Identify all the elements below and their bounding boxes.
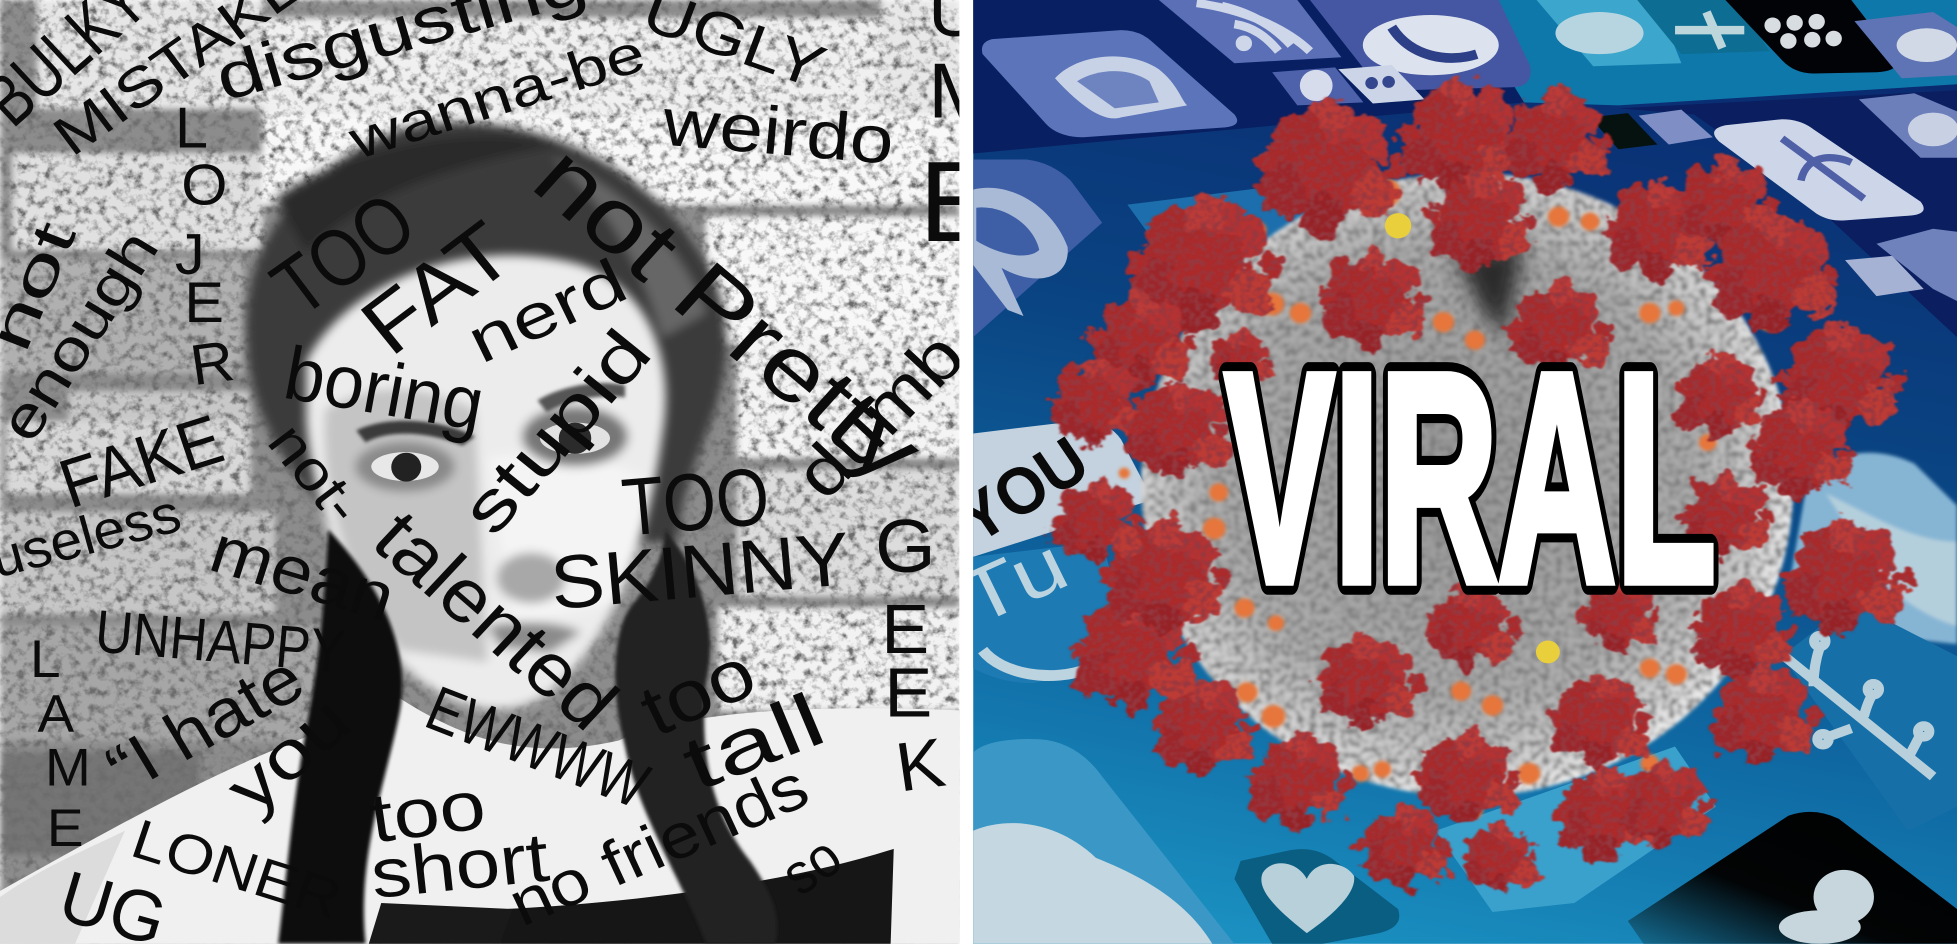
word: geek e: E xyxy=(884,654,932,731)
icon: usb symbol xyxy=(1769,636,1933,777)
word: no friends: no friends xyxy=(498,750,819,940)
top navy band xyxy=(973,0,1524,154)
dark right band xyxy=(1618,90,1957,337)
icon: black dots xyxy=(1725,0,1897,73)
word: lame m: M xyxy=(45,739,91,797)
eyes and brows xyxy=(356,383,625,482)
icon: small purple tile xyxy=(1639,110,1713,144)
word: nerd: nerd xyxy=(456,245,637,377)
icon: tube tile xyxy=(946,522,1134,683)
icon: heart tile xyxy=(1234,849,1399,944)
icon: pale sync tile xyxy=(1714,119,1924,220)
icon: phone bubble xyxy=(1310,0,1531,90)
word: loner: LONER xyxy=(124,807,349,930)
brick wall xyxy=(0,0,959,944)
icon: small black wifi xyxy=(1590,113,1657,149)
panel: viral coronavirus over app icons xyxy=(944,0,1957,944)
word: too: too xyxy=(627,631,768,752)
blue app background xyxy=(973,0,1957,944)
word: wanna-be: wanna-be xyxy=(341,22,653,171)
panel: girl covered in insults xyxy=(0,0,998,944)
word: fake: FAKE xyxy=(50,400,232,523)
word: boring: boring xyxy=(278,332,490,447)
word: geek g: G xyxy=(875,505,936,589)
word: loser l: L xyxy=(175,96,208,160)
word: right edge e: E xyxy=(919,137,998,265)
top teal band xyxy=(1461,0,1957,105)
icon: r tile xyxy=(973,160,1102,337)
word: loser o: O xyxy=(181,154,227,217)
icon: small phone xyxy=(1272,67,1363,105)
neck and shirt xyxy=(0,698,959,944)
word: loser r: R xyxy=(186,329,238,398)
word: lame l: L xyxy=(30,630,61,689)
word: too: too xyxy=(365,765,490,857)
left braid xyxy=(278,530,402,944)
virus xyxy=(1047,77,1911,895)
face xyxy=(306,255,666,709)
word: geek e: E xyxy=(881,590,929,668)
word: you: you xyxy=(211,682,366,827)
word: skinny: SKINNY xyxy=(547,518,853,626)
right braid xyxy=(615,530,777,944)
word: loser e: E xyxy=(184,271,224,335)
icon: tube tile: Tu xyxy=(946,522,1081,641)
icon: right purple tile xyxy=(1859,93,1957,158)
orange spike buds xyxy=(1119,178,1782,819)
word: too: TOO xyxy=(255,175,432,333)
word: loser s: J xyxy=(175,223,205,287)
icon: you tile: YOU xyxy=(944,423,1102,557)
icon: small pale tile xyxy=(1338,65,1424,104)
word: not: not- xyxy=(256,412,376,535)
icon: wifi xyxy=(1159,0,1341,63)
icon: teal tile xyxy=(1537,0,1681,66)
icon: plane xyxy=(1637,0,1769,54)
word: lame e: E xyxy=(47,799,84,858)
icon: cloud tile xyxy=(973,739,1234,944)
word: unhappy: UNHAPPY xyxy=(93,598,348,686)
word: ewwww: EWWWW xyxy=(417,673,659,822)
icon: center bottom tile xyxy=(1436,746,1716,912)
word: mean: mean xyxy=(202,511,404,636)
word: geek k: K xyxy=(891,723,950,806)
word: right edge m: M xyxy=(928,47,996,134)
icon: right bird tile xyxy=(1788,453,1957,644)
word: dumb: dumb xyxy=(780,318,979,513)
icon: mid tile xyxy=(1127,187,1360,289)
word: weirdo: weirdo xyxy=(659,84,897,179)
title: viral xyxy=(1225,311,1716,644)
word: so: so xyxy=(770,824,854,907)
word: talented: talented xyxy=(357,495,633,747)
icon: shell xyxy=(982,30,1237,137)
icon: right small tiles xyxy=(1845,256,1924,296)
icon: black tile xyxy=(1628,812,1957,944)
icon: right lower tile xyxy=(1782,602,1957,831)
word: short: short xyxy=(367,818,553,913)
word: tall: tall xyxy=(671,678,837,807)
word: stupid: stupid xyxy=(445,315,666,548)
sphere shadow creases xyxy=(1455,247,1524,337)
red spike proteins xyxy=(1047,77,1911,895)
icon: top right purple tile xyxy=(1854,12,1957,78)
word: not pretty: not Pretty xyxy=(515,125,942,502)
virus sphere xyxy=(1141,173,1793,796)
word: too: TOO xyxy=(618,450,773,553)
handwritten insults xyxy=(0,0,998,944)
word: i hate: “I hate xyxy=(93,640,317,807)
yellow spike buds xyxy=(1385,213,1560,663)
word: fat: FAT xyxy=(344,204,530,372)
app icon grid xyxy=(944,0,1957,944)
word: lame a: A xyxy=(38,684,74,743)
hair xyxy=(246,122,727,542)
